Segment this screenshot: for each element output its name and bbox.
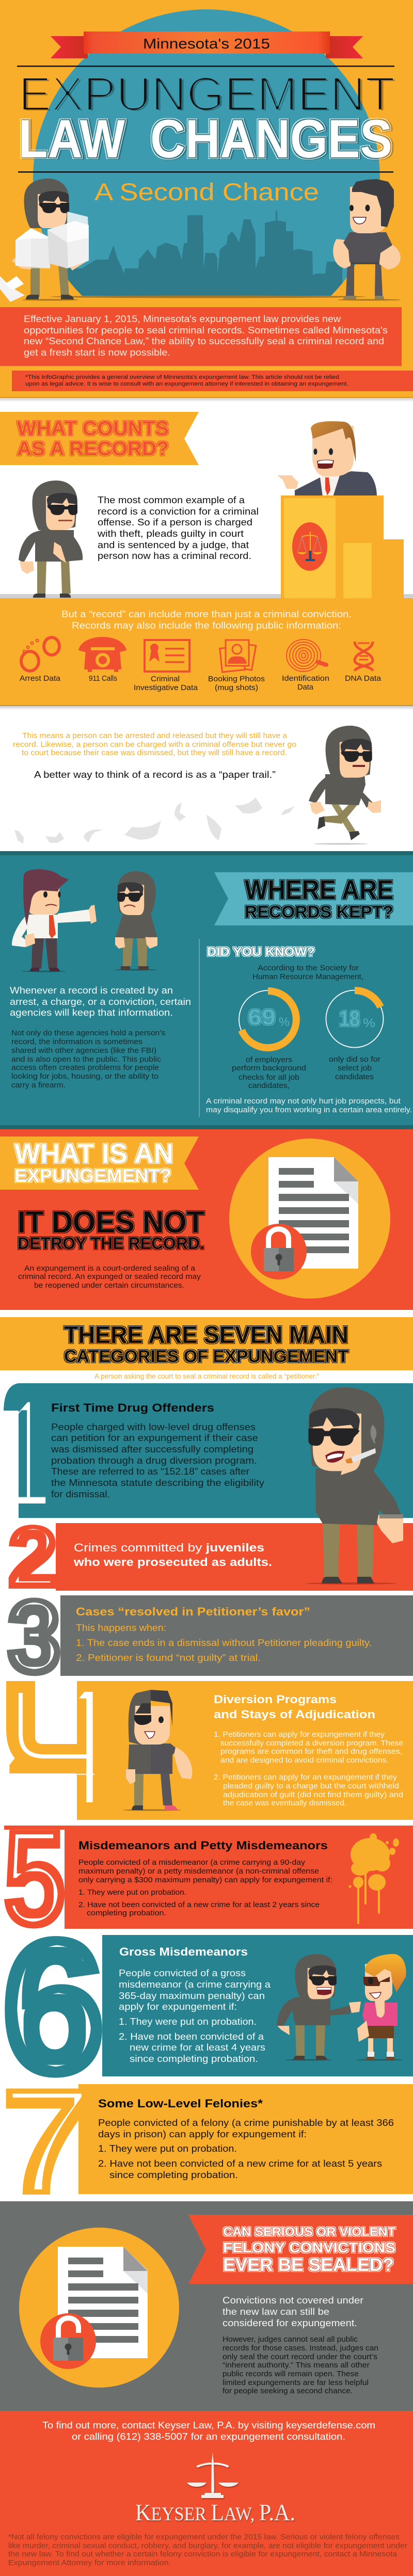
panel: intro statement: Effective January 1, 2015, Minnesota's expungement law provides new <box>24 314 341 324</box>
source text: According to the Society for <box>258 964 359 972</box>
icon: telephone <box>78 637 126 672</box>
donut captions: candidates <box>335 1073 374 1081</box>
panel: category 4 <box>6 1681 413 1820</box>
panel: intro statement: new “Second Chance Law,” the ability to successfully seal a criminal record and <box>24 336 384 346</box>
heading banner: WHAT IS AN <box>14 1139 173 1169</box>
icon labels <box>20 675 382 692</box>
paper stack right <box>47 221 89 268</box>
body text: offense. So if a person is charged <box>98 517 252 527</box>
icon: sealed document with closed padlock <box>229 1139 390 1299</box>
category text: days in prison) can apply for expungement if: <box>98 2129 307 2139</box>
category text: since completing probation. <box>130 2054 258 2064</box>
category text: and are designed to avoid criminal convictions. <box>220 1756 389 1765</box>
subtitle: A Second Chance <box>94 178 319 205</box>
category text <box>119 1968 271 2064</box>
donut chart: 18 percent: % <box>363 1016 375 1030</box>
paper scraps trail <box>14 797 295 844</box>
numeral 6: 6 <box>2 1902 105 2112</box>
contact text: or calling (612) 338-5007 for an expungement consultation. <box>72 2431 345 2442</box>
podium <box>281 495 404 600</box>
heading banner <box>0 1137 199 1190</box>
body text: Whenever a record is created by an <box>10 985 173 996</box>
heading banner: EVER BE SEALED? <box>223 2255 394 2275</box>
category text: People convicted of a gross <box>119 1968 246 1978</box>
intro text: Records may also include the following public information: <box>72 620 341 631</box>
icon labels: Investigative Data <box>134 684 198 692</box>
panel: public information types <box>0 598 413 710</box>
donut captions: checks for all job <box>239 1074 299 1082</box>
definition text: An expungement is a court-ordered sealing of a <box>24 1265 196 1273</box>
icon: fingerprint and magnifier <box>287 639 326 671</box>
category text: 1. The case ends in a dismissal without Petitioner pleading guilty. <box>76 1638 372 1648</box>
panel: intro statement <box>0 307 402 366</box>
detail text <box>223 2335 378 2395</box>
petitioner note: A person asking the court to seal a criminal record is called a “petitioner.” <box>94 1372 319 1380</box>
category text: maximum penalty) or a petty misdemeanor (a non-criminal offense <box>78 1867 319 1876</box>
category text: who were prosecuted as adults. <box>73 1556 272 1569</box>
category text: misdemeanor (a crime carrying a <box>119 1979 271 1990</box>
icon labels: DNA Data <box>345 675 382 683</box>
category text: 2. Petitioner is found “not guilty” at trial. <box>76 1653 261 1663</box>
icon labels: Identification <box>282 675 329 683</box>
category text <box>98 2118 394 2180</box>
definition text <box>18 1265 201 1290</box>
panel: disclaimer: upon as legal advice. It is wise to consult with an expungement attorney if interested in obtaining an expungement. <box>25 381 348 387</box>
panel: disclaimer: *This InfoGraphic provides a general overview of Minnesota's expungement law. This article should not be relied <box>25 374 339 380</box>
icon: document with open padlock <box>19 2228 179 2388</box>
heading banner: FELONY CONVICTIONS <box>223 2239 395 2255</box>
secondary text: record, the information is sometimes <box>11 1038 142 1046</box>
secondary text: shared with other agencies (like the FBI) <box>11 1047 156 1055</box>
panel: category 2 <box>8 1509 413 1604</box>
footnote: like murder, criminal sexual conduct, robbery, and burglary, for example, are not eligible for expungement under <box>8 2542 407 2550</box>
panel: seven categories heading <box>0 1317 413 1380</box>
icon labels: 911 Calls <box>89 675 117 683</box>
category text: 2. Have not been convicted of a new crime for at least 5 years <box>98 2158 382 2169</box>
intro text <box>61 609 352 631</box>
statement headline: DETROY THE RECORD. <box>18 1234 204 1253</box>
lead text: Convictions not covered under <box>223 2295 363 2306</box>
body text: agencies will keep that information. <box>10 1007 173 1018</box>
body text <box>97 495 259 561</box>
city skyline <box>67 211 343 296</box>
figure: judge <box>277 421 377 497</box>
donut captions: of employers <box>246 1056 292 1064</box>
paper stack left <box>15 228 50 268</box>
donut chart: 69 percent <box>239 990 297 1048</box>
panel: category 6 <box>2 1901 413 2112</box>
numeral 7: 7 <box>1 2058 93 2225</box>
numeral 4: 4 <box>6 1647 127 1846</box>
category text: programs are common for theft and drug offenses, <box>220 1748 402 1756</box>
category text: apply for expungement if: <box>119 2002 237 2012</box>
icon: handcuffs <box>21 637 59 671</box>
category text: People convicted of a misdemeanor (a crime carrying a 90-day <box>78 1859 306 1867</box>
explanatory text: record. Likewise, a person can be charged with a criminal offense but never go <box>13 741 296 749</box>
panel: category 7 <box>1 2058 413 2225</box>
figure: man gesturing stop <box>12 869 97 972</box>
category text: Cases “resolved in Petitioner’s favor” <box>76 1605 310 1618</box>
title: expungement: EXPUNGEMENT <box>19 67 395 121</box>
category text: was dismissed after successfully completing <box>51 1444 253 1454</box>
figure: hooded man with paper stacks <box>0 179 89 302</box>
intro text: But a “record” can include more than just a criminal conviction. <box>61 609 352 619</box>
secondary text <box>11 1029 165 1090</box>
figure: large hooded man smoking <box>306 1387 403 1585</box>
icon: DNA helix <box>355 642 373 671</box>
footnote: *Not all felony convictions are eligible for expungement under the 2015 law. Serious or violent felony offenses <box>8 2533 400 2541</box>
secondary text: carry a firearm. <box>11 1081 66 1090</box>
heading banner <box>188 2215 413 2284</box>
category heading: and Stays of Adjudication <box>214 1708 375 1721</box>
statement headline <box>18 1205 204 1253</box>
panel: what counts as a record <box>0 412 413 600</box>
title rules <box>17 66 394 172</box>
body text: and is sentenced by a judge, that <box>98 540 249 550</box>
donut chart: 18 percent: 18 <box>339 1006 360 1031</box>
lead text: the new law can still be <box>223 2307 329 2317</box>
category heading <box>214 1693 375 1721</box>
panel: category 1 <box>1 1366 413 1539</box>
numeral 6: 6 <box>2 1901 105 2111</box>
icon: paint splatter <box>349 1833 399 1924</box>
category text: 2. Have not been convicted of a <box>119 2031 264 2042</box>
category text: 2. Have not been convicted of a new crime for at least 2 years since <box>78 1901 320 1909</box>
teal dome <box>33 9 380 296</box>
heading banner: CAN SERIOUS OR VIOLENT <box>223 2225 395 2239</box>
contact text: To find out more, contact Keyser Law, P.A. by visiting keyserdefense.com <box>42 2420 375 2430</box>
figure: hooded man <box>19 481 83 598</box>
logo: sword and scales <box>187 2453 239 2498</box>
detail text: for people seeking a second chance. <box>223 2387 353 2395</box>
body text: arrest, a charge, or a conviction, certain <box>10 997 191 1007</box>
numeral 5: 5 <box>3 1804 66 1954</box>
icon: booking photos <box>220 640 256 672</box>
figure: walking hooded man <box>309 726 381 844</box>
heading banner: WHERE ARE <box>245 875 393 905</box>
source text <box>252 964 363 981</box>
numeral 4 <box>6 1681 94 1802</box>
icon labels: (mug shots) <box>215 684 258 692</box>
category text: These are referred to as “152.18” cases after <box>51 1466 249 1477</box>
contact text <box>42 2420 375 2442</box>
category text: adjudication of guilt (did not find them guilty) and <box>223 1791 403 1799</box>
category text: 1. They were put on probation. <box>98 2143 237 2154</box>
numeral 1: 1 <box>1 1366 53 1539</box>
panel: paper trail <box>13 726 381 844</box>
panel: intro statement: opportunities for people to seal criminal records. Sometimes called Minnesota's <box>24 325 388 335</box>
category text: can petition for an expungement if their case <box>51 1433 258 1443</box>
icon labels: Data <box>297 683 314 692</box>
icon labels: Criminal <box>151 675 180 683</box>
heading banner: EXPUNGEMENT? <box>14 1165 171 1186</box>
category text: the case was eventually dismissed. <box>223 1799 346 1807</box>
category heading: Misdemeanors and Petty Misdemeanors <box>78 1839 328 1852</box>
category text <box>76 1605 372 1663</box>
category text <box>51 1422 264 1499</box>
heading banner: AS A RECORD? <box>17 438 169 460</box>
floor line <box>0 594 413 598</box>
detail text: only seal the court record under the court’s <box>223 2353 377 2361</box>
panel: category 5 <box>3 1803 413 1954</box>
donut chart: 69 percent: % <box>279 1015 290 1029</box>
icon labels: Arrest Data <box>20 675 61 683</box>
category heading: Some Low-Level Felonies* <box>98 2097 263 2110</box>
detail text: records for those cases. Instead, judges can <box>223 2344 378 2353</box>
category text: the Minnesota statute describing the eligibility <box>51 1478 264 1488</box>
category text: 1. Petitioners can apply for expungement if they <box>214 1731 385 1739</box>
category text: only carrying a $300 maximum penalty) can apply for expungement if: <box>78 1876 332 1884</box>
category text: completing probation. <box>87 1909 166 1917</box>
icon: certificate <box>145 640 189 671</box>
secondary text: Not only do these agencies hold a person's <box>11 1029 165 1037</box>
source text: Human Resource Management, <box>252 973 363 981</box>
heading banner: WHAT COUNTS <box>17 418 169 440</box>
explanatory text: This means a person can be arrested and released but they will still have a <box>22 732 288 740</box>
category text: since completing probation. <box>109 2170 238 2180</box>
secondary text: access often creates problems for people <box>11 1064 159 1072</box>
numeral 7: 7 <box>1 2058 93 2225</box>
lead text <box>223 2295 363 2328</box>
category text <box>214 1731 403 1807</box>
category text: pleaded guilty to a charge but the court withheld <box>223 1782 399 1790</box>
footnote: the new law. To find out whether a certain felony conviction is eligible for expungement, contact a Minnesota <box>8 2550 398 2558</box>
body text: person now has a criminal record. <box>98 551 251 561</box>
numeral 2: 2 <box>8 1509 57 1603</box>
category text: 1. They were put on probation. <box>78 1889 186 1897</box>
body text: record is a conviction for a criminal <box>98 506 259 517</box>
category text: 365-day maximum penalty) can <box>119 1991 265 2001</box>
category text: People charged with low-level drug offenses <box>51 1422 256 1432</box>
donut captions: candidates, <box>248 1082 290 1090</box>
category text: probation through a drug diversion program. <box>51 1455 257 1466</box>
category heading: Gross Misdemeanors <box>119 1945 248 1958</box>
category text: for dismissal. <box>51 1489 110 1499</box>
figure: half hooded man half regular man <box>94 1690 192 1811</box>
title: law changes <box>19 109 392 169</box>
category heading: First Time Drug Offenders <box>51 1401 214 1414</box>
detail text: However, judges cannot seal all public <box>223 2335 358 2344</box>
icon: scales emblem <box>292 522 327 571</box>
figure: hooded man threatening nerd <box>277 1954 361 2060</box>
explanatory text: to court because their case was dismissed, but they will still have a record. <box>22 749 287 757</box>
detail text: public records will remain open. These <box>223 2370 359 2378</box>
numeral 4: 4 <box>6 1647 125 1846</box>
donut captions: only did so for <box>329 1055 380 1064</box>
panel: disclaimer <box>12 371 413 391</box>
definition text: criminal record. An expunged or sealed record may <box>18 1273 201 1281</box>
figure: smiling man <box>333 179 401 300</box>
panel: intro statement: get a fresh start is now possible. <box>24 347 170 358</box>
definition text: be reopened under certain circumstances. <box>34 1282 184 1290</box>
donut captions: select job <box>338 1064 372 1073</box>
category text: new crime for at least 4 years <box>130 2042 265 2053</box>
lead text: considered for expungement. <box>223 2318 357 2328</box>
logo wordmark: KEYSER LAW, P.A. <box>135 2499 295 2525</box>
category text: This happens when: <box>76 1623 166 1633</box>
body text <box>10 985 191 1018</box>
panel: seven categories heading: THERE ARE SEVEN MAIN <box>64 1321 348 1348</box>
panel: category 3 <box>8 1579 413 1693</box>
body text: with theft, pleads guilty in court <box>97 529 244 539</box>
category heading: Diversion Programs <box>214 1693 337 1706</box>
category text: People convicted of a felony (a crime punishable by at least 366 <box>98 2118 394 2128</box>
category text: 1. They were put on probation. <box>119 2017 257 2027</box>
closing note <box>206 1097 412 1114</box>
explanatory text <box>13 732 296 757</box>
secondary text: looking for jobs, housing, or the ability to <box>11 1073 158 1081</box>
category text: 2. Petitioners can apply for an expungement if they <box>214 1773 398 1782</box>
category text: successfully completed a diversion program. These <box>220 1739 403 1748</box>
did you know heading: DID YOU KNOW? <box>207 945 315 959</box>
ribbon text: Minnesota's 2015 <box>143 36 270 52</box>
icon labels: Booking Photos <box>208 675 265 683</box>
body text: The most common example of a <box>98 495 245 505</box>
heading banner <box>0 412 199 465</box>
numeral 3: 3 <box>8 1580 61 1693</box>
panel: hero <box>0 0 413 402</box>
numeral 5: 5 <box>3 1803 66 1953</box>
panel: where are records kept <box>0 851 413 1129</box>
closing note: A criminal record may not only hurt job prospects, but <box>206 1097 401 1106</box>
secondary text: and is also open to the public. This public <box>11 1055 161 1064</box>
category text: Crimes committed by juveniles <box>74 1541 264 1554</box>
donut captions: perform background <box>232 1064 306 1073</box>
ground shadow <box>50 295 366 298</box>
ribbon banner <box>51 31 363 58</box>
panel: footer <box>0 2411 413 2576</box>
heading banner <box>214 872 413 925</box>
donut chart: 69 percent: 69 <box>248 1005 276 1030</box>
category text <box>73 1541 272 1569</box>
figure: hooded man standing <box>114 871 157 970</box>
detail text: limited expungements are far less helpful <box>223 2379 369 2387</box>
paper trail statement: A better way to think of a record is as a “paper trail.” <box>34 770 276 780</box>
panel: serious or violent felonies <box>0 2201 413 2411</box>
category text <box>78 1859 332 1917</box>
panel: seven categories heading: CATEGORIES OF EXPUNGEMENT <box>64 1347 349 1366</box>
heading banner: RECORDS KEPT? <box>245 903 393 922</box>
panel: what is an expungement <box>0 1129 413 1310</box>
detail text: “inherent authority.” This means all other <box>223 2361 370 2370</box>
donut chart: 18 percent <box>326 990 383 1048</box>
footnote <box>8 2533 407 2567</box>
falling sheet <box>0 276 25 302</box>
footnote: Expungement Attorney for more information. <box>8 2559 171 2567</box>
title: law changes: LAW <box>19 109 125 169</box>
numeral 3: 3 <box>8 1579 61 1692</box>
statement headline: IT DOES NOT <box>18 1205 204 1239</box>
numeral 2: 2 <box>8 1510 57 1604</box>
figure: nerd with glasses <box>356 1954 406 2060</box>
donut captions <box>232 1055 380 1090</box>
closing note: may disqualify you from working in a certain area entirely. <box>206 1106 412 1114</box>
